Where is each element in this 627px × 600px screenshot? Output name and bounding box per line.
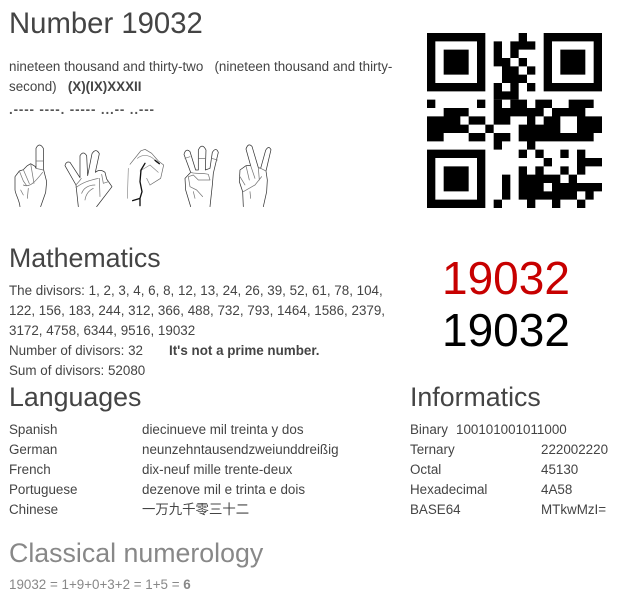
informatics table: 222002220	[541, 442, 608, 457]
informatics table: 100101001011000	[456, 422, 567, 437]
heading: Classical numerology: Classical numerology	[9, 538, 263, 568]
divisors text: Sum of divisors: 52080	[9, 363, 145, 378]
heading: Languages: Languages	[9, 382, 141, 412]
languages table: Spanish	[9, 422, 57, 437]
languages table: diecinueve mil treinta y dos	[142, 422, 304, 437]
informatics table: Binary	[410, 422, 448, 437]
morse code: .---- ----. ----- ...-- ..---	[9, 102, 155, 117]
languages table: Portuguese	[9, 482, 78, 497]
informatics table: Ternary	[410, 442, 455, 457]
divisors text: 122, 156, 183, 244, 312, 366, 488, 732, 793, 1464, 1586, 2379,	[9, 303, 385, 318]
number names text: second) (X)(IX)XXXII	[9, 79, 141, 94]
QR code	[427, 33, 602, 208]
languages table: French	[9, 462, 51, 477]
hand sign 1	[15, 145, 47, 207]
informatics table: Octal	[410, 462, 441, 477]
languages table: dezenove mil e trinta e dois	[142, 482, 305, 497]
informatics table: 4A58	[541, 482, 572, 497]
hand sign 5	[239, 145, 271, 207]
divisors text: Number of divisors: 32	[9, 343, 143, 358]
languages table: Chinese	[9, 502, 58, 517]
languages table: neunzehntausendzweiunddreißig	[142, 442, 339, 457]
informatics table: MTkwMzI=	[541, 502, 606, 517]
languages table	[9, 422, 339, 517]
informatics table: BASE64	[410, 502, 461, 517]
heading: Mathematics: Mathematics	[9, 243, 161, 273]
large number in black: 19032	[442, 304, 570, 356]
informatics table: Hexadecimal	[410, 482, 487, 497]
title: Number 19032	[9, 7, 203, 40]
hand sign 3	[127, 149, 164, 206]
large number in red: 19032	[442, 252, 570, 304]
numerology sum: 19032 = 1+9+0+3+2 = 1+5 = 6	[9, 577, 191, 592]
languages table: 一万九千零三十二	[142, 502, 249, 517]
number names text	[9, 59, 392, 94]
informatics table	[410, 422, 608, 517]
divisors text: It's not a prime number.	[169, 343, 320, 358]
languages table: dix-neuf mille trente-deux	[142, 462, 292, 477]
sign language hands	[14, 144, 272, 207]
heading: Informatics: Informatics	[410, 382, 541, 412]
divisors text: The divisors: 1, 2, 3, 4, 6, 8, 12, 13, 24, 26, 39, 52, 61, 78, 104,	[9, 283, 383, 298]
informatics table: 45130	[541, 462, 578, 477]
languages table: German	[9, 442, 57, 457]
hand sign 4	[184, 146, 218, 207]
divisors text: 3172, 4758, 6344, 9516, 19032	[9, 323, 195, 338]
divisors text	[9, 283, 385, 378]
number names text: nineteen thousand and thirty-two (nineteen thousand and thirty-	[9, 59, 392, 74]
hand sign 2	[65, 151, 112, 207]
